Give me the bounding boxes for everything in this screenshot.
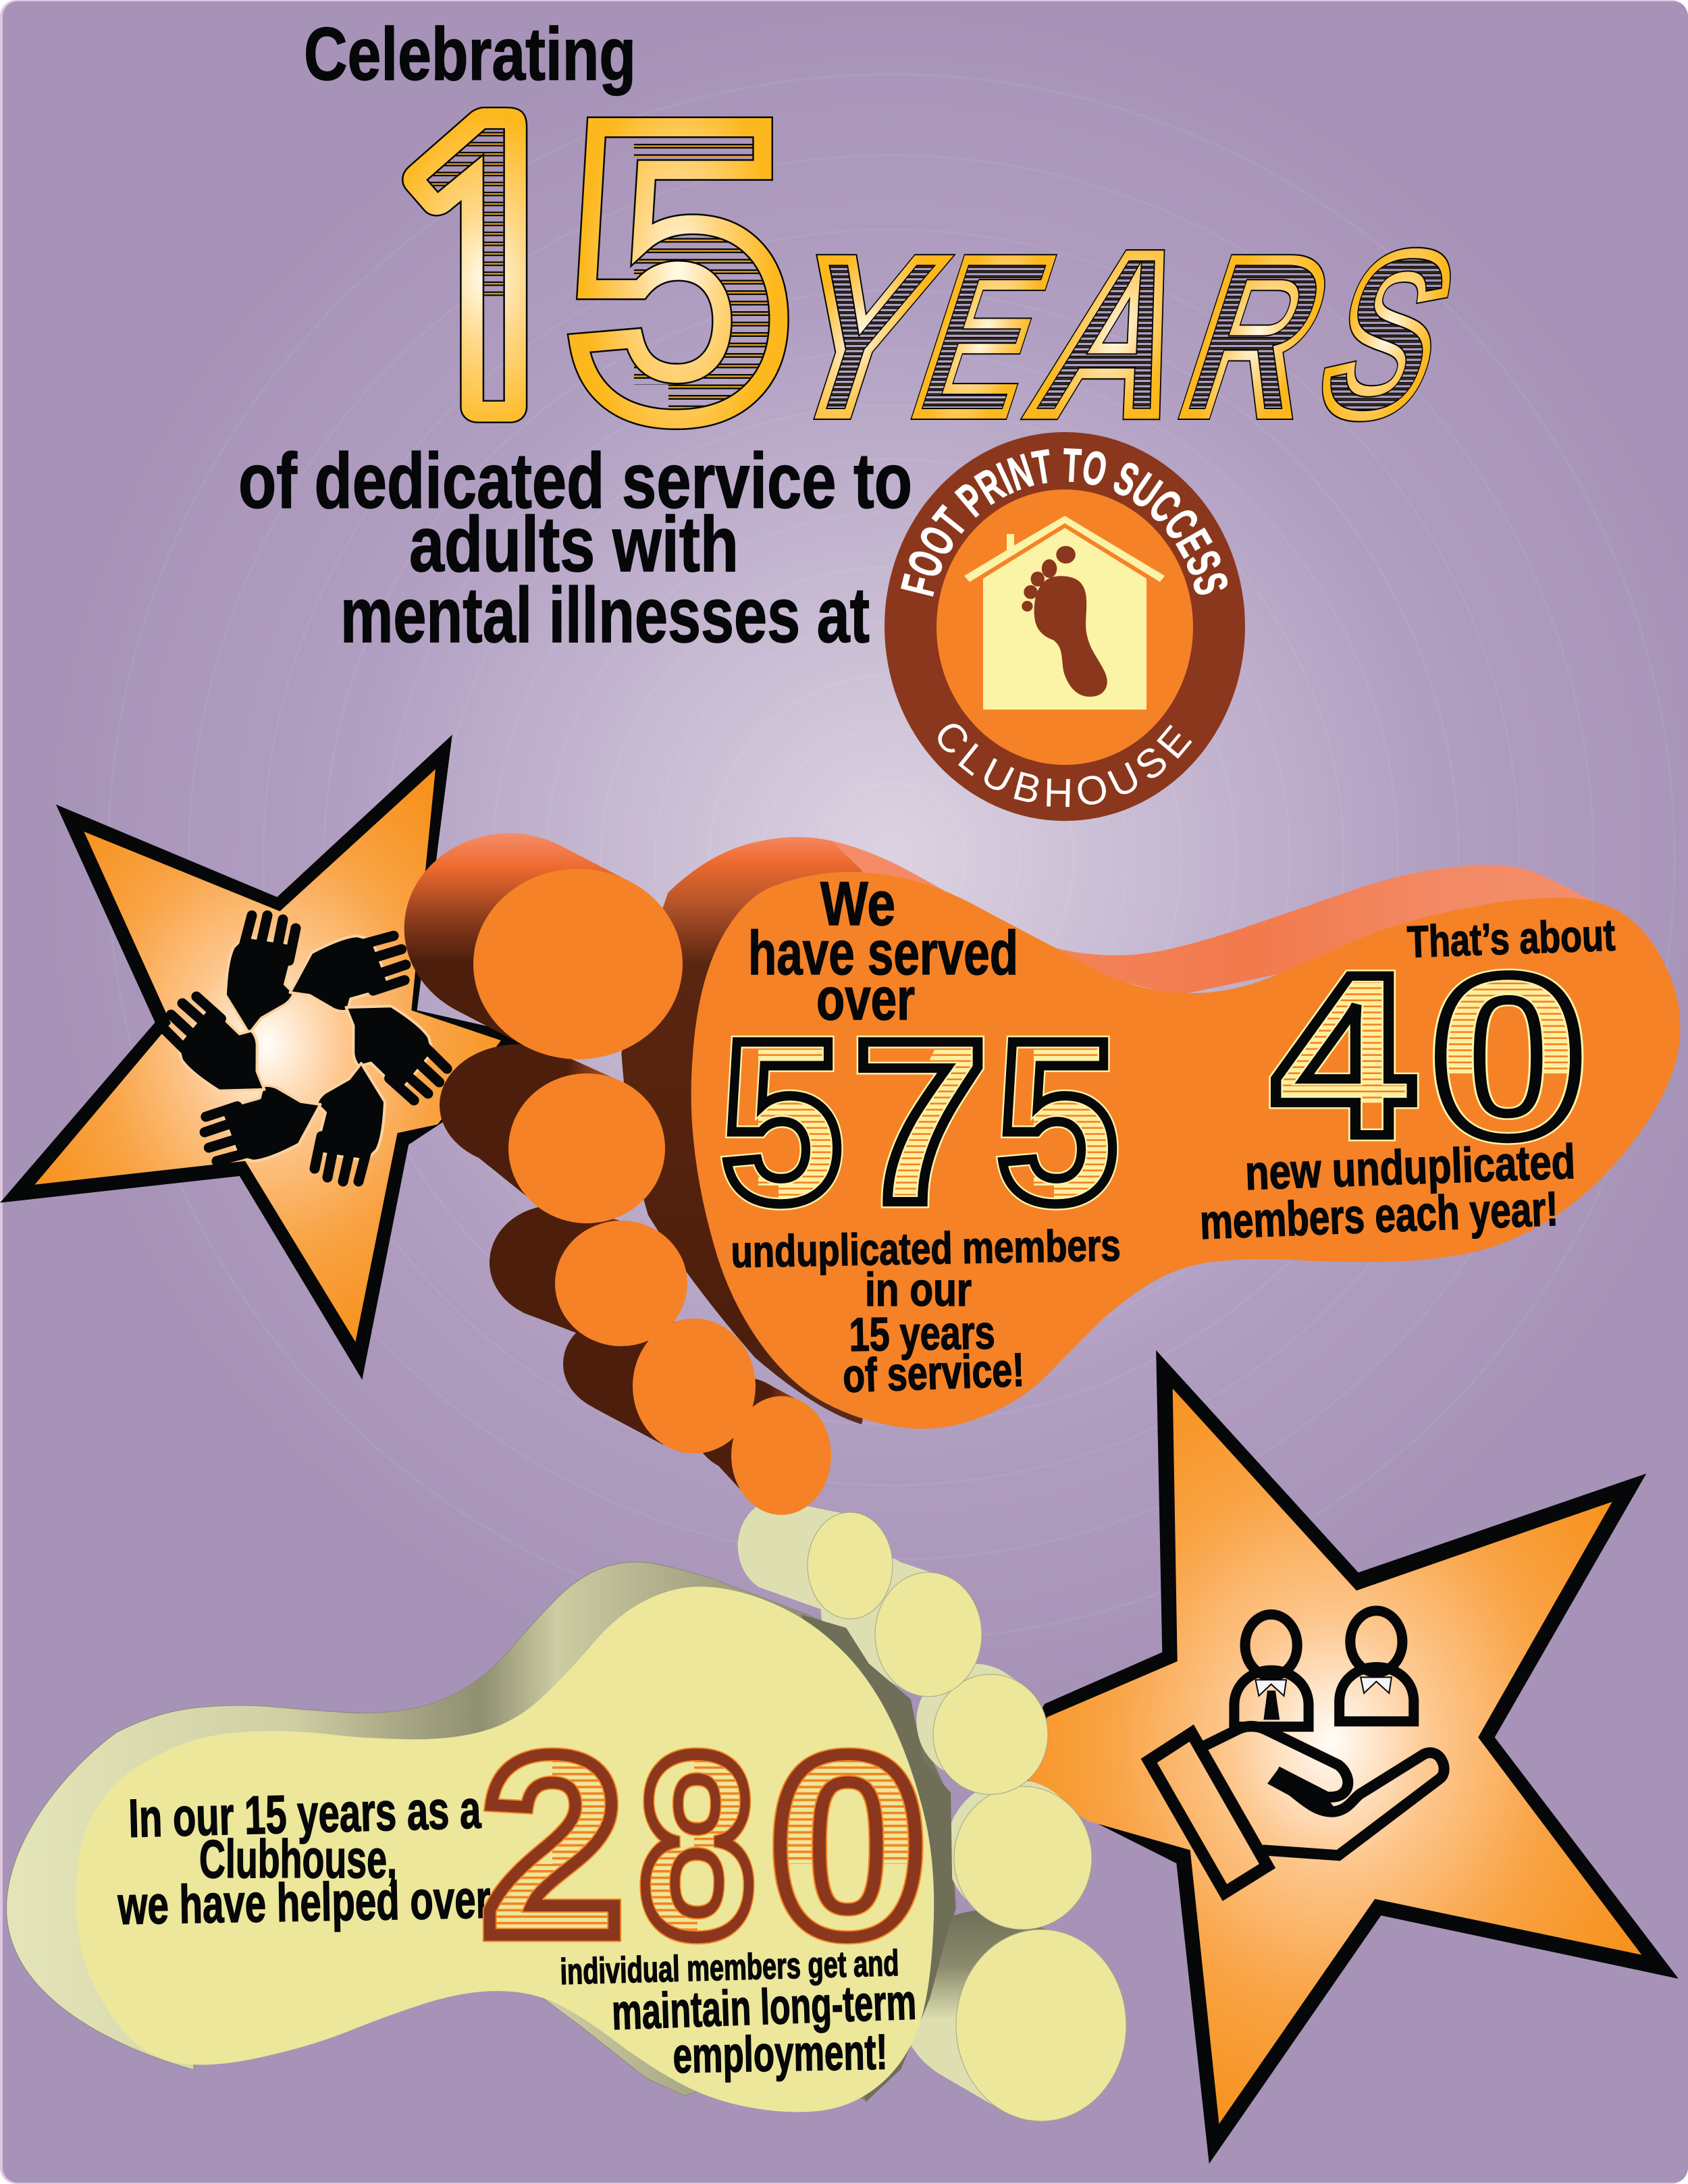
cream toe sides bbox=[738, 1499, 1084, 2108]
number 575: 5 bbox=[720, 992, 843, 1252]
logo: Foot Print to Success Clubhouse bbox=[885, 432, 1245, 821]
word YEARS: S bbox=[1294, 206, 1482, 462]
orange foot sole bbox=[621, 837, 1681, 1429]
text: unduplicated members in our 15 years of service: unduplicated members bbox=[731, 1220, 1121, 1277]
text: unduplicated members in our 15 years of service: 15 years bbox=[849, 1306, 995, 1361]
word YEARS: A bbox=[1009, 206, 1228, 462]
text: That's about: That’s about bbox=[1406, 909, 1616, 967]
text: We have served over: over bbox=[816, 965, 915, 1032]
subheading text: mental illnesses at bbox=[340, 571, 870, 659]
number 575 bbox=[720, 992, 1119, 1252]
subheading text: of dedicated service to bbox=[238, 437, 912, 525]
cream foot shadow and sole face bbox=[76, 1587, 953, 2112]
word YEARS: Y bbox=[754, 212, 964, 462]
orange toe 2 bbox=[440, 1044, 665, 1223]
orange toe 1 bbox=[404, 833, 683, 1059]
text: We have served over bbox=[748, 870, 1018, 1032]
number 575: 7 bbox=[853, 992, 988, 1251]
big number 15: 1 bbox=[362, 86, 608, 469]
icon: people over open hand bbox=[1149, 1611, 1444, 1892]
number 280 bbox=[482, 1747, 924, 1944]
big number 15: 1 bbox=[362, 86, 608, 469]
subheading text: adults with bbox=[409, 500, 739, 588]
text: individual members get and maintain long-term employment bbox=[560, 1943, 917, 2083]
big number 15: 5 bbox=[566, 36, 790, 504]
icon: house bbox=[964, 516, 1165, 710]
number 40: 4 bbox=[1272, 927, 1415, 1184]
number 280: 0 bbox=[769, 1702, 927, 1990]
number 575: 5 bbox=[996, 992, 1119, 1252]
number 280: 2 bbox=[481, 1701, 625, 1990]
word YEARS: E bbox=[891, 211, 1076, 462]
number 280: 0 bbox=[769, 1702, 927, 1990]
text: new unduplicated members each year bbox=[1199, 1135, 1576, 1250]
text: In our 15 years as a Clubhouse, we have helped over: Clubhouse, bbox=[199, 1829, 397, 1889]
icon: six hands in a circle bbox=[150, 913, 460, 1184]
word YEARS: A bbox=[1009, 206, 1228, 462]
text: new unduplicated members each year: new unduplicated bbox=[1244, 1135, 1576, 1200]
number 280: 8 bbox=[639, 1701, 756, 1990]
text: unduplicated members in our 15 years of service: of service! bbox=[842, 1343, 1025, 1402]
subheading text bbox=[238, 437, 912, 659]
orange toe 4 bbox=[563, 1313, 756, 1454]
number 575: 7 bbox=[853, 992, 988, 1251]
number 575: 5 bbox=[996, 992, 1119, 1252]
text: new unduplicated members each year: members each year! bbox=[1199, 1182, 1559, 1250]
text: individual members get and maintain long-term employment: maintain long-term bbox=[611, 1973, 917, 2040]
number 40: 0 bbox=[1429, 928, 1587, 1186]
number 280: 0 bbox=[769, 1702, 927, 1990]
number 280: 8 bbox=[639, 1701, 756, 1990]
text: In our 15 years as a Clubhouse, we have helped over bbox=[117, 1779, 491, 1936]
star: left with hands bbox=[0, 735, 560, 1380]
number 40: 4 bbox=[1272, 927, 1415, 1184]
text: We have served over: We bbox=[820, 870, 895, 938]
text: individual members get and maintain long-term employment: individual members get and bbox=[560, 1943, 899, 1992]
logo bottom text: CLUBHOUSE bbox=[938, 724, 1192, 807]
icon: footprint bbox=[1022, 546, 1107, 697]
cream foot bbox=[7, 1499, 1126, 2121]
number 280: 2 bbox=[481, 1701, 625, 1990]
big number 15: 1 bbox=[362, 86, 608, 469]
text: individual members get and maintain long-term employment: employment! bbox=[672, 2023, 888, 2083]
word YEARS: R bbox=[1157, 213, 1356, 462]
text: unduplicated members in our 15 years of service bbox=[731, 1220, 1121, 1402]
word YEARS: R bbox=[1157, 213, 1356, 462]
text: In our 15 years as a Clubhouse, we have helped over: we have helped over bbox=[117, 1869, 491, 1936]
big number 15 bbox=[362, 36, 790, 504]
big number 15: 5 bbox=[566, 36, 790, 504]
text: In our 15 years as a Clubhouse, we have helped over: In our 15 years as a bbox=[128, 1779, 482, 1848]
text: We have served over: have served bbox=[748, 919, 1018, 988]
number 40: 0 bbox=[1429, 928, 1587, 1186]
word YEARS: S bbox=[1294, 206, 1482, 462]
number 575: 7 bbox=[853, 992, 988, 1251]
text: unduplicated members in our 15 years of service: in our bbox=[865, 1263, 972, 1316]
number 575: 5 bbox=[720, 992, 843, 1252]
number 280: 8 bbox=[639, 1701, 756, 1990]
orange toe 5 bbox=[693, 1377, 831, 1515]
orange foot bbox=[404, 833, 1681, 1515]
number 40 bbox=[1269, 968, 1584, 1145]
big number 15: 5 bbox=[566, 36, 790, 504]
word YEARS: Y bbox=[754, 212, 964, 462]
cream foot sole side bbox=[7, 1562, 956, 2100]
cream toe faces bbox=[808, 1512, 1126, 2121]
heading: Celebrating: Celebrating bbox=[304, 13, 636, 96]
number 40: 0 bbox=[1429, 928, 1587, 1186]
word YEARS bbox=[754, 206, 1482, 462]
logo top text: FOOT PRINT TO SUCCESS bbox=[901, 448, 1228, 597]
number 575: 5 bbox=[720, 992, 843, 1252]
orange toe 3 bbox=[490, 1205, 687, 1346]
star: right with people and hand bbox=[1002, 1350, 1679, 2164]
number 280: 2 bbox=[481, 1701, 625, 1990]
number 575: 5 bbox=[996, 992, 1119, 1252]
number 40: 4 bbox=[1272, 927, 1415, 1184]
word YEARS: E bbox=[891, 211, 1076, 462]
